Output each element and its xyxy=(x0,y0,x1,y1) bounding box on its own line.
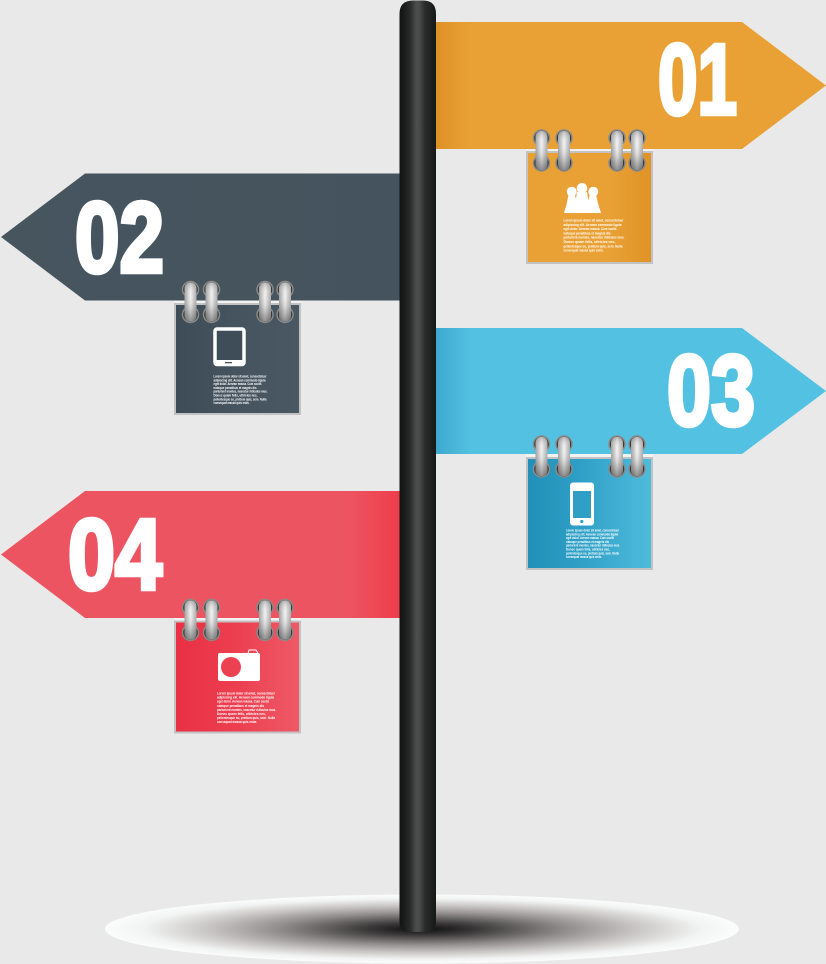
rings 04 xyxy=(182,600,293,640)
text block 01: Lorem ipsum dolor sit amet, consectetuer xyxy=(564,218,624,222)
text block 04: Lorem ipsum dolor sit amet, consectetuer xyxy=(217,690,275,696)
text block 04: pellentesque eu, pretium quis, sem. Nulla xyxy=(217,715,276,720)
icon: people xyxy=(564,183,601,213)
text block 03: eget dolor. Aenean massa. Cum sociis xyxy=(566,535,614,540)
sign 03 xyxy=(430,328,826,569)
pole xyxy=(400,0,436,932)
ground shadow xyxy=(105,894,739,964)
text block 01 xyxy=(564,218,624,253)
text block 04: adipiscing elit. Aenean commodo ligula xyxy=(217,695,275,700)
card 02 xyxy=(175,304,300,414)
number 02: 02 xyxy=(75,182,164,294)
text block 01: Donec quam felis, ultricies nec, xyxy=(564,239,616,244)
icon: tablet xyxy=(215,329,244,365)
text block 02: consequat massa quis enim. xyxy=(214,400,250,405)
text block 03: pellentesque eu, pretium quis, sem. Nulla xyxy=(566,550,620,555)
number 04: 04 xyxy=(68,499,162,611)
arrow: sign 01 xyxy=(430,22,826,149)
text block 02 xyxy=(214,374,268,405)
icon: phone xyxy=(570,482,594,526)
strip under arrow 04 xyxy=(174,618,301,621)
arrow: sign 04 xyxy=(1,491,405,618)
text block 02: Lorem ipsum dolor sit amet, consectetuer xyxy=(214,374,267,378)
card 01 xyxy=(527,152,652,263)
text block 03 xyxy=(566,528,620,559)
text block 03: Donec quam felis, ultricies nec, xyxy=(566,546,610,552)
text block 01: consequat massa quis enim. xyxy=(564,248,604,253)
text block 03: adipiscing elit. Aenean commodo ligula xyxy=(566,531,619,536)
text block 02: Donec quam felis, ultricies nec, xyxy=(214,392,258,398)
text block 02: pellentesque eu, pretium quis, sem. Nulla xyxy=(214,396,267,401)
text block 04: natoque penatibus et magnis dis xyxy=(217,703,264,708)
text block 02: adipiscing elit. Aenean commodo ligula xyxy=(214,377,266,382)
rings 03 xyxy=(534,436,645,477)
number 03: 03 xyxy=(667,335,755,447)
text block 02: natoque penatibus et magnis dis xyxy=(214,385,256,390)
icon: camera xyxy=(218,650,260,681)
text block 03: parturient montes, nascetur ridiculus mus. xyxy=(566,543,620,548)
sign 04 xyxy=(1,491,405,732)
strip under arrow 02 xyxy=(174,300,301,304)
text block 01: adipiscing elit. Aenean commodo ligula xyxy=(564,222,622,227)
text block 01: natoque penatibus et magnis dis xyxy=(564,230,610,235)
text block 01: pellentesque eu, pretium quis, sem. Nulla xyxy=(564,243,623,248)
text block 04: eget dolor. Aenean massa. Cum sociis xyxy=(217,699,269,704)
text block 04: consequat massa quis enim. xyxy=(217,719,257,724)
text block 01: parturient montes, nascetur ridiculus mus. xyxy=(564,235,624,240)
text block 04: parturient montes, nascetur ridiculus mus. xyxy=(217,707,276,712)
sign 01 xyxy=(430,22,826,263)
card 04 xyxy=(175,622,300,732)
strip under arrow 03 xyxy=(526,454,653,457)
text block 02: eget dolor. Aenean massa. Cum sociis xyxy=(214,381,262,386)
text block 03: natoque penatibus et magnis dis xyxy=(566,539,609,544)
text block 02: parturient montes, nascetur ridiculus mus. xyxy=(214,389,268,394)
text block 04 xyxy=(217,690,276,724)
arrow: sign 03 xyxy=(430,328,826,454)
sign 02 xyxy=(1,174,405,414)
text block 01: eget dolor. Aenean massa. Cum sociis xyxy=(564,226,616,231)
rings 01 xyxy=(534,130,645,171)
strip under arrow 01 xyxy=(526,149,653,152)
text block 03: Lorem ipsum dolor sit amet, consectetuer xyxy=(566,528,619,532)
text block 03: consequat massa quis enim. xyxy=(566,554,602,559)
text block 04: Donec quam felis, ultricies nec, xyxy=(217,711,266,716)
rings 02 xyxy=(182,282,293,322)
arrow: sign 02 xyxy=(1,174,405,300)
card 03 xyxy=(527,458,652,569)
number 01: 01 xyxy=(658,24,737,136)
